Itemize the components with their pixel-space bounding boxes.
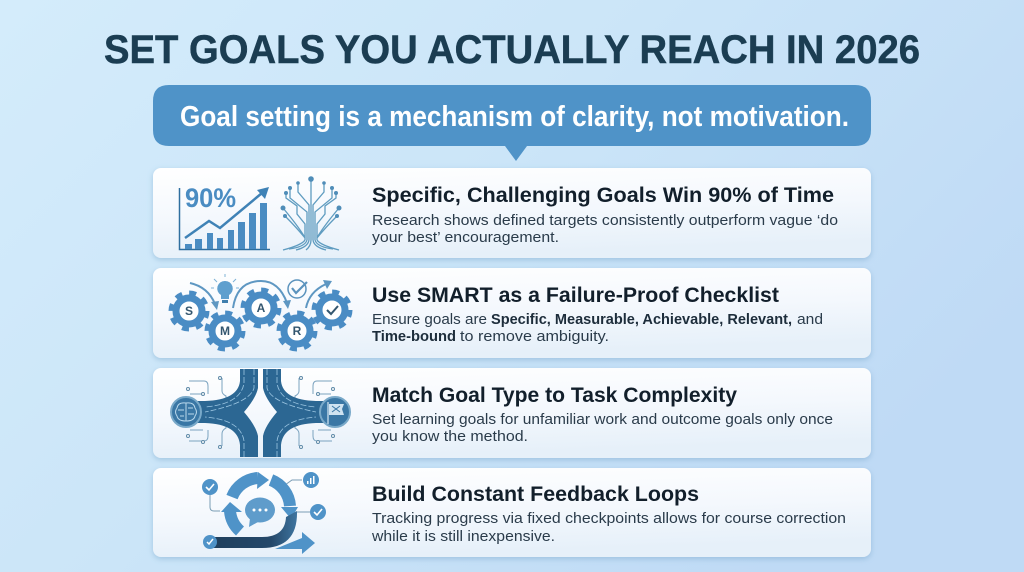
heading: Use SMART as a Failure-Proof Checklist — [372, 284, 779, 307]
icon: circuit tree — [280, 176, 342, 250]
body text: Time-bound — [372, 328, 456, 345]
icon: 90% growth chart: 90% — [185, 183, 236, 213]
icon: check badge — [288, 280, 307, 298]
title: SET GOALS YOU ACTUALLY REACH IN 2026 — [104, 28, 920, 72]
body text: while it is still inexpensive. — [371, 528, 555, 545]
panel: SMART checklist — [153, 268, 871, 358]
callout: key message: Goal setting is a mechanism of clarity, not motivation. — [180, 101, 849, 133]
body text: you know the method. — [372, 428, 528, 445]
panel: specific goals — [153, 168, 871, 258]
body text: Research shows defined targets consistently outperform vague ‘do — [372, 212, 838, 229]
speech bubble — [245, 498, 275, 527]
swoosh — [210, 511, 297, 548]
heading: Specific, Challenging Goals Win 90% of Time — [372, 184, 834, 207]
icon: SMART gears: M — [220, 324, 230, 338]
icon: brain — [176, 403, 196, 421]
icon: light bulb — [211, 274, 239, 303]
panel: goal type — [153, 368, 871, 458]
icon: 90% growth chart — [180, 183, 270, 250]
body text: to remove ambiguity. — [460, 328, 609, 345]
body text — [372, 411, 833, 445]
icon: flag — [328, 402, 344, 424]
arrow — [275, 532, 315, 554]
flow arrows — [190, 281, 326, 308]
body text — [372, 311, 823, 345]
icon: SMART gears: S — [185, 304, 193, 318]
cycle arrows — [221, 472, 298, 531]
panel: feedback loops — [153, 468, 871, 557]
icon: SMART gears — [171, 274, 350, 349]
body text: Ensure goals are — [372, 311, 487, 328]
body text: and — [797, 311, 823, 328]
body text: your best’ encouragement. — [372, 229, 559, 246]
heading: Match Goal Type to Task Complexity — [372, 384, 737, 407]
body text — [372, 212, 838, 246]
icon: feedback loop — [202, 472, 326, 554]
body text: Specific, Measurable, Achievable, Relevant, — [491, 311, 792, 328]
heading: Build Constant Feedback Loops — [372, 483, 699, 506]
callout: key message — [153, 85, 871, 161]
badges — [202, 472, 326, 549]
icon: diverging roads with brain and flag — [171, 369, 350, 457]
body text: Set learning goals for unfamiliar work and outcome goals only once — [372, 411, 833, 428]
icon: SMART gears: R — [293, 324, 302, 338]
body text: Tracking progress via fixed checkpoints allows for course correction — [372, 510, 846, 527]
icon: SMART gears: A — [257, 301, 266, 315]
body text — [371, 510, 846, 545]
